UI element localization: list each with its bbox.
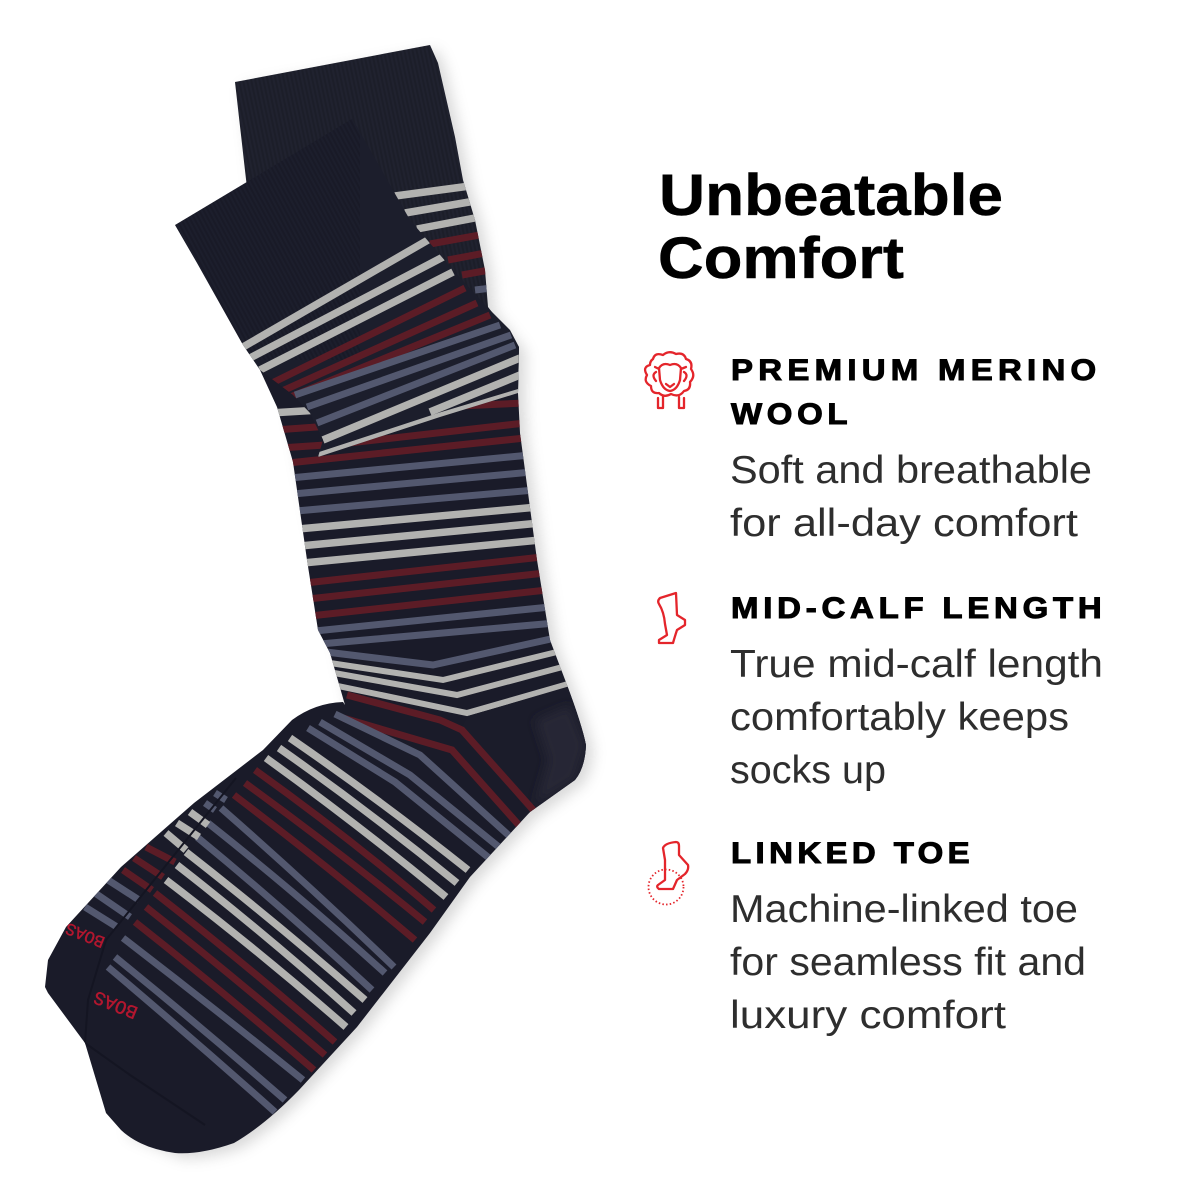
description: Soft and breathable (730, 449, 1092, 492)
heading: LINKED TOE (731, 835, 970, 870)
red brand mark on lower toe: BOAS (91, 985, 141, 1023)
front folded cuff (175, 170, 519, 457)
description: Machine-linked toe (730, 888, 1078, 931)
description: for seamless fit and (730, 941, 1086, 984)
title line two: Comfort (658, 226, 904, 291)
heading: WOOL (731, 396, 848, 431)
heading: PREMIUM MERINO (731, 352, 1096, 387)
heel patch highlight (540, 710, 586, 796)
icon: mid-calf sock (658, 593, 685, 643)
description (730, 449, 1092, 545)
description (730, 888, 1086, 1037)
back sock cuff (235, 45, 488, 308)
title (658, 163, 1003, 291)
back foot stripes behind seam (85, 793, 226, 927)
feature: linked toe (648, 835, 1086, 1037)
description: True mid-calf length (730, 643, 1103, 686)
description (730, 643, 1103, 792)
sock leg and foot body (30, 290, 600, 1170)
soft drop shadow under sock (128, 50, 593, 1158)
feature: mid-calf length (658, 590, 1103, 792)
sole seam and toe fold (84, 794, 224, 1045)
description: comfortably keeps (730, 696, 1069, 739)
description: for all-day comfort (730, 502, 1078, 545)
description: socks up (730, 749, 886, 792)
front foot stripes (108, 738, 468, 1112)
sock photograph illustration (30, 40, 600, 1170)
upper foot stripes near ankle (308, 695, 535, 862)
leg stripes (270, 403, 575, 713)
heading: MID-CALF LENGTH (731, 590, 1102, 625)
heel gusset (468, 686, 586, 814)
red brand mark on upper toe: BOAS (63, 917, 108, 950)
title line one: Unbeatable (659, 163, 1003, 228)
icon: linked toe sock (648, 842, 688, 904)
feature: premium merino wool (645, 352, 1096, 545)
heading (731, 352, 1096, 431)
description: luxury comfort (730, 994, 1006, 1037)
icon: sheep (645, 352, 693, 408)
